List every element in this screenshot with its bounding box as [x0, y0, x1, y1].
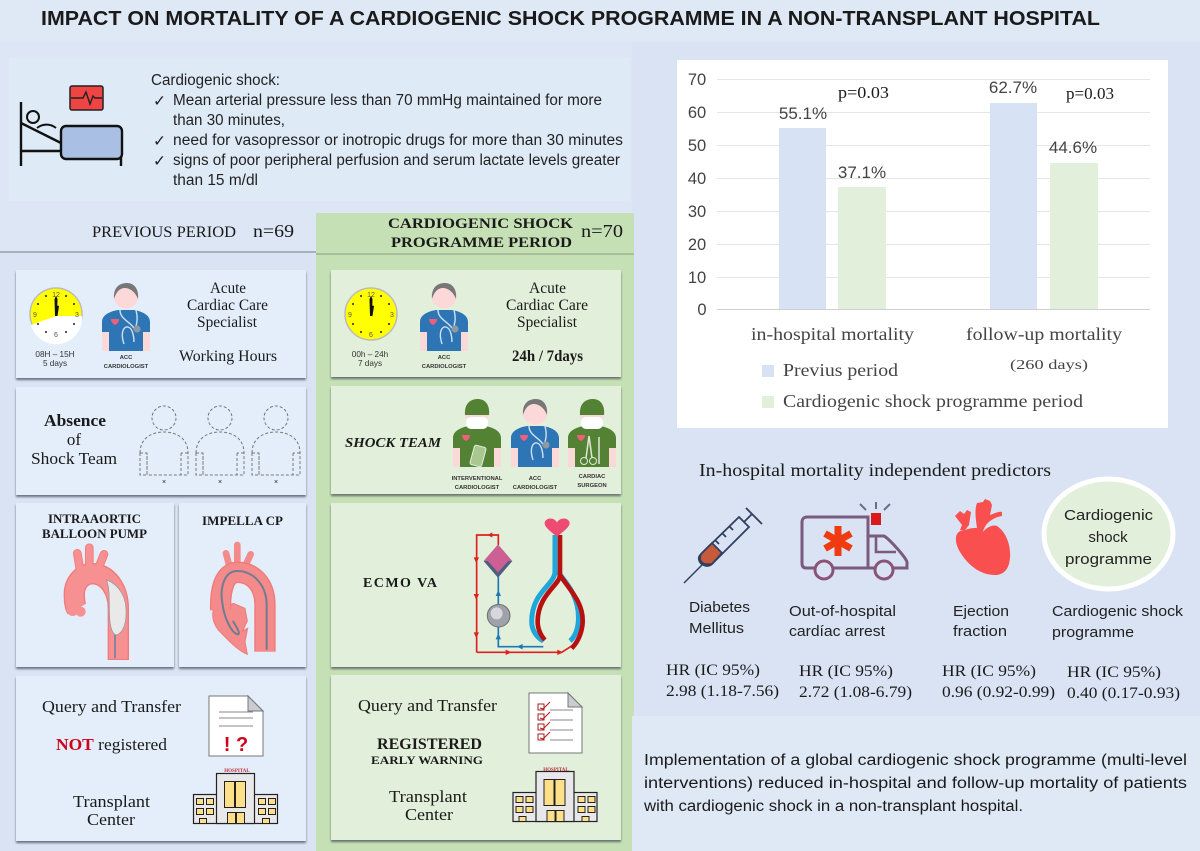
- panel: query and transfer registered: [331, 675, 621, 840]
- y-axis labels: 20: [688, 236, 706, 254]
- text: definition criteria: ✓: [153, 153, 166, 170]
- text: definition criteria: Cardiogenic shock:: [151, 72, 280, 89]
- predictor: diabetes mellitus: [684, 508, 762, 637]
- text: query and transfer registered: [358, 696, 497, 767]
- legend: [762, 360, 1083, 411]
- bars: follow-up mortality: p=0.03: [1066, 84, 1114, 103]
- text: clock hours 24h: [352, 350, 389, 368]
- hazard ratio: programme: [1067, 664, 1180, 702]
- title: IMPACT ON MORTALITY OF A CARDIOGENIC SHOCK PROGRAMME IN A NON-TRANSPLANT HOSPITAL: [41, 8, 1100, 30]
- text: specialist and hours: Cardiac Care: [187, 297, 268, 314]
- icon: clock 08H-15H: 12: [52, 292, 60, 299]
- text: specialist 24h: Specialist: [517, 314, 578, 331]
- bars: follow-up mortality: [989, 78, 1114, 309]
- bars: in-hospital mortality: p=0.03: [838, 83, 889, 102]
- icon: hospital: [513, 768, 597, 822]
- x-axis labels: in-hospital mortality: [751, 324, 914, 344]
- icon: clock 08H-15H: 9: [33, 312, 37, 319]
- text: transplant center: [73, 792, 150, 829]
- hazard ratio: diabetes: HR (IC 95%): [666, 662, 760, 679]
- bars: in-hospital mortality: 55.1%: [779, 104, 827, 123]
- icon: document with question: [209, 696, 263, 756]
- text: definition criteria: [151, 72, 623, 189]
- icon: checklist document: [529, 693, 582, 753]
- chart gridlines and axis: [717, 80, 1150, 310]
- icon: interventional cardiologist: INTERVENTIONAL: [452, 476, 503, 482]
- icon: ambulance: [802, 502, 907, 579]
- panel: query and transfer not registered: [16, 676, 306, 841]
- hazard ratio: programme: 0.40 (0.17-0.93): [1067, 685, 1180, 702]
- hazard ratio: ejection fraction: 0.96 (0.92-0.99): [942, 684, 1055, 701]
- predictor: out-of-hospital cardiac arrest: Out-of-hospital: [789, 603, 896, 620]
- heading: cardiogenic shock programme period: PROGRAMME PERIOD: [391, 235, 572, 251]
- icon: hospital: [194, 769, 278, 824]
- y-axis labels: 10: [688, 269, 706, 287]
- bars: in-hospital mortality: 37.1%: [838, 163, 886, 182]
- icon: interventional cardiologist: CARDIOLOGIST: [455, 485, 500, 491]
- predictor: cardiogenic shock programme: programme: [1052, 624, 1134, 641]
- panel: conclusion: [632, 716, 1200, 851]
- icon: clock 08H-15H: 6: [54, 332, 58, 339]
- bars: follow-up mortality: 44.6%: [1049, 138, 1097, 157]
- text: transplant center: Center: [87, 810, 135, 829]
- icon: programme circle: [1044, 479, 1173, 589]
- panel: conclusion: interventions) reduced in-hospital and follow-up mortality of patients: [644, 775, 1187, 792]
- text: absence of shock team: [31, 411, 117, 468]
- heading: IABP: INTRAAORTIC: [48, 511, 141, 526]
- green column background: [316, 213, 634, 851]
- panel: intraaortic balloon pump: [16, 503, 174, 667]
- text: query and transfer registered: REGISTERED: [377, 736, 482, 753]
- text: specialist and hours: Acute: [210, 280, 246, 297]
- text: clock hours: [35, 350, 75, 368]
- icon: cardiac surgeon: [568, 399, 616, 489]
- icon: clock 24h: [345, 288, 397, 340]
- hazard ratio: programme: HR (IC 95%): [1067, 664, 1161, 681]
- text: transplant center: Transplant: [73, 792, 150, 811]
- y-axis labels: 50: [688, 137, 706, 155]
- panel: programme acute cardiac care specialist: [331, 270, 621, 377]
- icon: clock 08H-15H: 3: [75, 312, 79, 319]
- icon: document with question: ! ?: [224, 734, 248, 756]
- heading: predictors: In-hospital mortality independent predictors: [699, 460, 1051, 480]
- icon: ACC cardiologist: ACC: [120, 355, 133, 361]
- bars: follow-up mortality: 62.7%: [989, 78, 1037, 97]
- legend: Cardiogenic shock programme period: [783, 391, 1083, 411]
- icon: programme circle: Cardiogenic: [1064, 507, 1154, 524]
- hazard ratio: diabetes: [666, 662, 779, 700]
- text: query and transfer: Query and Transfer: [42, 697, 181, 716]
- icon: cardiac surgeon: CARDIAC: [579, 474, 606, 480]
- text: specialist 24h: Acute: [529, 280, 566, 297]
- text: absence of shock team: Shock Team: [31, 449, 117, 468]
- icon: dashed absent team: ×: [274, 479, 278, 486]
- x-axis labels: (260 days): [1010, 358, 1088, 373]
- text: definition criteria: than 30 minutes,: [173, 112, 285, 129]
- text: specialist 24h: Cardiac Care: [506, 297, 588, 314]
- text: query and transfer registered: Query and Transfer: [358, 696, 497, 715]
- text: specialist and hours: Working Hours: [179, 348, 277, 365]
- x-axis labels: follow-up mortality: [966, 324, 1122, 344]
- icon: dashed absent team: [140, 406, 300, 486]
- text: definition criteria: than 15 m/dl: [173, 172, 258, 189]
- icon: ACC cardiologist: CARDIOLOGIST: [422, 364, 467, 370]
- icon: patient in bed with monitor: [21, 86, 122, 166]
- x-axis labels: [751, 324, 1122, 373]
- panel: cardiogenic shock definition: [9, 58, 630, 201]
- y-axis labels: [688, 71, 707, 319]
- predictor: cardiogenic shock programme: [1044, 479, 1184, 641]
- icon: heart: [955, 499, 1010, 575]
- y-axis labels: 60: [688, 104, 706, 122]
- text: specialist and hours: [179, 280, 277, 365]
- text: specialist 24h: [506, 280, 588, 365]
- heading: IABP: [42, 511, 147, 541]
- icon: programme circle: shock: [1088, 529, 1128, 546]
- panel: conclusion: with cardiogenic shock in a non-transplant hospital.: [643, 798, 1023, 815]
- predictor: out-of-hospital cardiac arrest: [789, 502, 907, 640]
- text: transplant center: [389, 787, 467, 824]
- text: specialist 24h: 24h / 7days: [512, 348, 583, 365]
- predictor: cardiogenic shock programme: Cardiogenic shock: [1052, 603, 1184, 620]
- icon: clock 24h: 12: [367, 292, 375, 299]
- predictor: diabetes mellitus: Diabetes: [689, 599, 750, 616]
- icon: ACC cardiologist: [420, 283, 468, 370]
- text: absence of shock team: of: [67, 430, 81, 449]
- text: absence of shock team: Absence: [44, 411, 106, 430]
- text: query and transfer registered: EARLY WARNING: [371, 753, 483, 767]
- icon: ECMO circuit: [474, 518, 583, 655]
- predictor: ejection fraction: Ejection: [953, 603, 1009, 620]
- heading: cardiogenic shock programme period: [388, 216, 623, 251]
- hazard ratio: cardiac arrest: HR (IC 95%): [799, 663, 893, 680]
- heading: previous period: n=69: [253, 221, 294, 241]
- icon: syringe: [684, 508, 762, 583]
- text: transplant center: Transplant: [389, 787, 467, 806]
- text: transplant center: Center: [405, 805, 453, 824]
- hazard ratio: cardiac arrest: 2.72 (1.08-6.79): [799, 684, 912, 701]
- panel: ECMO VA: [331, 503, 621, 667]
- predictor: out-of-hospital cardiac arrest: cardíac arrest: [789, 623, 886, 640]
- heading: IABP: BALLOON PUMP: [42, 526, 147, 541]
- text: clock hours 24h: 7 days: [358, 359, 382, 368]
- text: clock hours: 08H – 15H: [35, 350, 75, 359]
- icon: cardiac surgeon: SURGEON: [577, 483, 607, 489]
- icon: clock 24h: 6: [369, 332, 373, 339]
- icon: ACC cardiologist: CARDIOLOGIST: [513, 485, 558, 491]
- hazard ratio: cardiac arrest: [799, 663, 912, 701]
- text: definition criteria: ✓: [153, 133, 166, 150]
- predictor: diabetes mellitus: Mellitus: [689, 620, 744, 637]
- heading: impella: IMPELLA CP: [202, 513, 283, 528]
- hazard ratio: ejection fraction: HR (IC 95%): [942, 663, 1036, 680]
- text: definition criteria: Mean arterial pressure less than 70 mmHg maintained for more: [173, 92, 602, 109]
- text: query and transfer: NOT registered: [56, 735, 168, 754]
- hazard ratio: diabetes: 2.98 (1.18-7.56): [666, 683, 779, 700]
- heading: previous period: [92, 221, 294, 241]
- heading: cardiogenic shock programme period: n=70: [581, 221, 623, 241]
- icon: ACC cardiologist: [511, 399, 559, 491]
- bars: in-hospital mortality: [779, 83, 889, 309]
- text: specialist and hours: Specialist: [197, 314, 258, 331]
- text: shock team: SHOCK TEAM: [345, 436, 442, 451]
- text: clock hours: 5 days: [43, 359, 67, 368]
- y-axis labels: 0: [697, 301, 707, 319]
- icon: aorta with impella: [213, 545, 267, 654]
- icon: ACC cardiologist: [102, 283, 150, 370]
- text: definition criteria: signs of poor peripheral perfusion and serum lactate levels greater: [173, 152, 620, 169]
- icon: ACC cardiologist: CARDIOLOGIST: [104, 364, 149, 370]
- predictor: ejection fraction: fraction: [953, 623, 1007, 640]
- icon: clock 24h: 9: [348, 312, 352, 319]
- y-axis labels: 40: [688, 170, 706, 188]
- icon: hospital: HOSPITAL: [224, 769, 250, 774]
- icon: clock 24h: 3: [390, 312, 394, 319]
- icon: clock 08H-15H: [30, 288, 82, 344]
- text: definition criteria: need for vasopressor or inotropic drugs for more than 30 minutes: [173, 132, 623, 149]
- predictor: ejection fraction: [953, 499, 1010, 640]
- icon: dashed absent team: ×: [162, 479, 166, 486]
- text: clock hours 24h: 00h – 24h: [352, 350, 389, 359]
- panel: impella CP: [179, 503, 306, 667]
- heading: previous period: PREVIOUS PERIOD: [92, 224, 236, 241]
- heading: cardiogenic shock programme period: CARDIOGENIC SHOCK: [388, 216, 573, 232]
- panel: conclusion: Implementation of a global cardiogenic shock programme (multi-level: [644, 752, 1187, 769]
- icon: ACC cardiologist: ACC: [529, 476, 542, 482]
- y-axis labels: 70: [688, 71, 706, 89]
- icon: ACC cardiologist: ACC: [438, 355, 451, 361]
- panel: previous acute cardiac care specialist: [16, 270, 306, 378]
- legend: Previus period: [783, 360, 898, 380]
- title band: [0, 0, 1200, 42]
- panel: absence of shock team: [16, 387, 306, 495]
- text: definition criteria: ✓: [153, 93, 166, 110]
- icon: hospital: HOSPITAL: [543, 768, 569, 773]
- panel: shock team: [331, 386, 621, 494]
- y-axis labels: 30: [688, 203, 706, 221]
- icon: interventional cardiologist: [452, 399, 503, 491]
- panel: bar chart: [677, 60, 1168, 428]
- text: ECMO VA: ECMO VA: [363, 576, 438, 591]
- icon: programme circle: programme: [1065, 551, 1152, 568]
- icon: aorta with balloon: [67, 548, 126, 660]
- icon: dashed absent team: ×: [218, 479, 222, 486]
- hazard ratio: ejection fraction: [942, 663, 1055, 701]
- text: query and transfer: [42, 697, 181, 754]
